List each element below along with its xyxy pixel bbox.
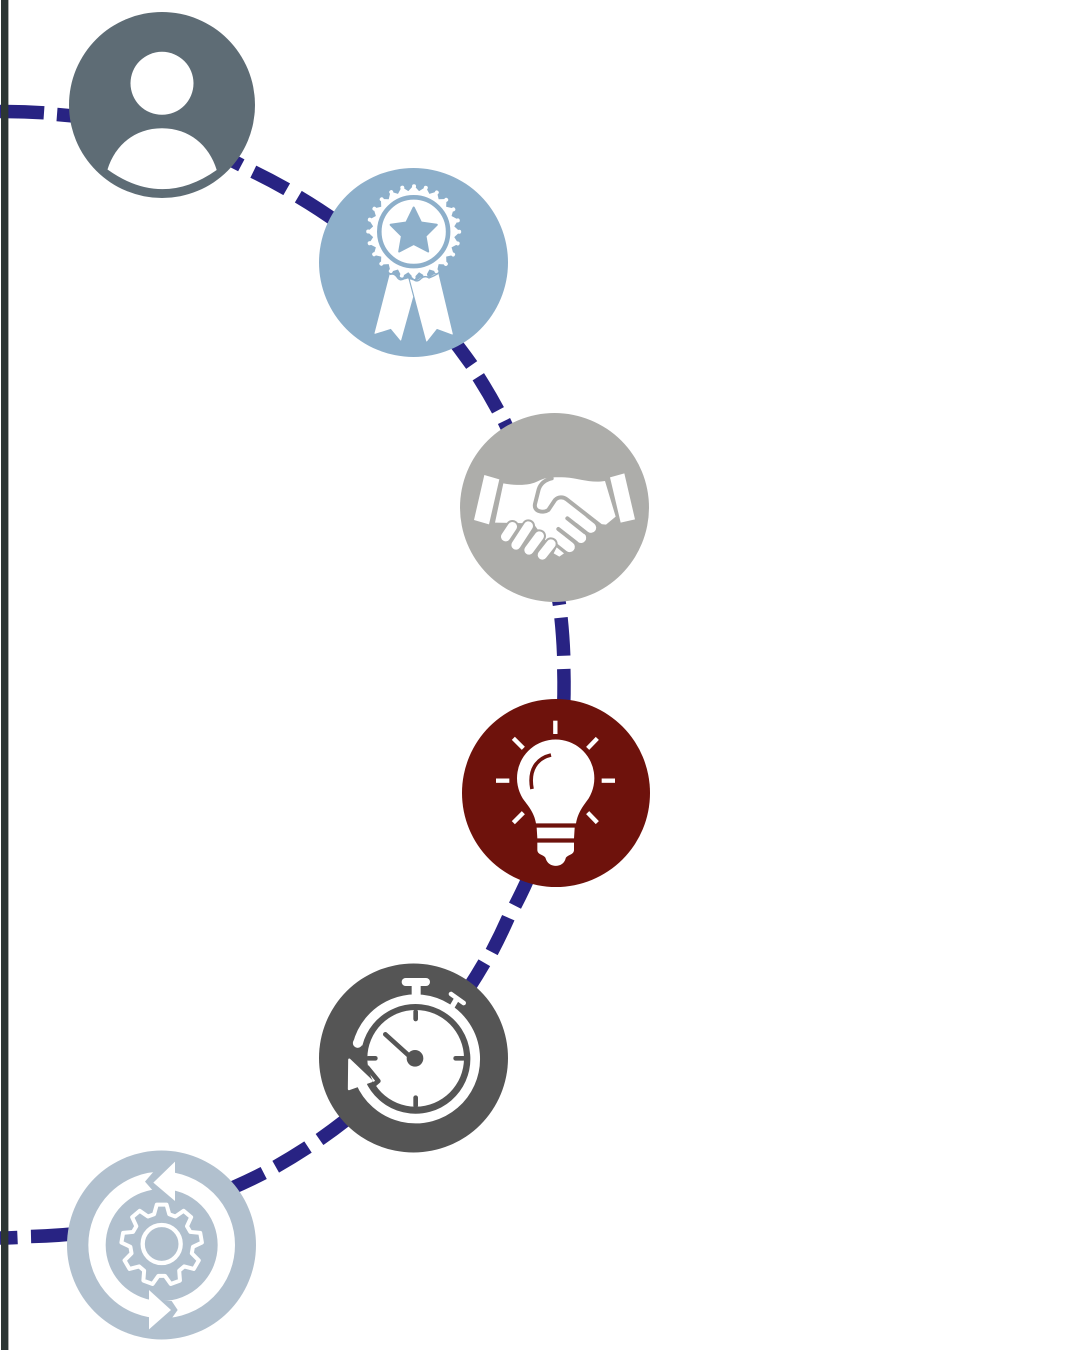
icon: award rosette bbox=[319, 168, 508, 357]
icon: light bulb bbox=[462, 699, 650, 887]
icon: handshake bbox=[460, 413, 649, 602]
icon: stopwatch bbox=[319, 964, 508, 1152]
icon: gear cycle bbox=[67, 1150, 256, 1340]
icon: person bbox=[69, 12, 255, 198]
left vertical bar bbox=[1, 0, 8, 1350]
dashed arc connector bbox=[0, 111, 564, 1238]
